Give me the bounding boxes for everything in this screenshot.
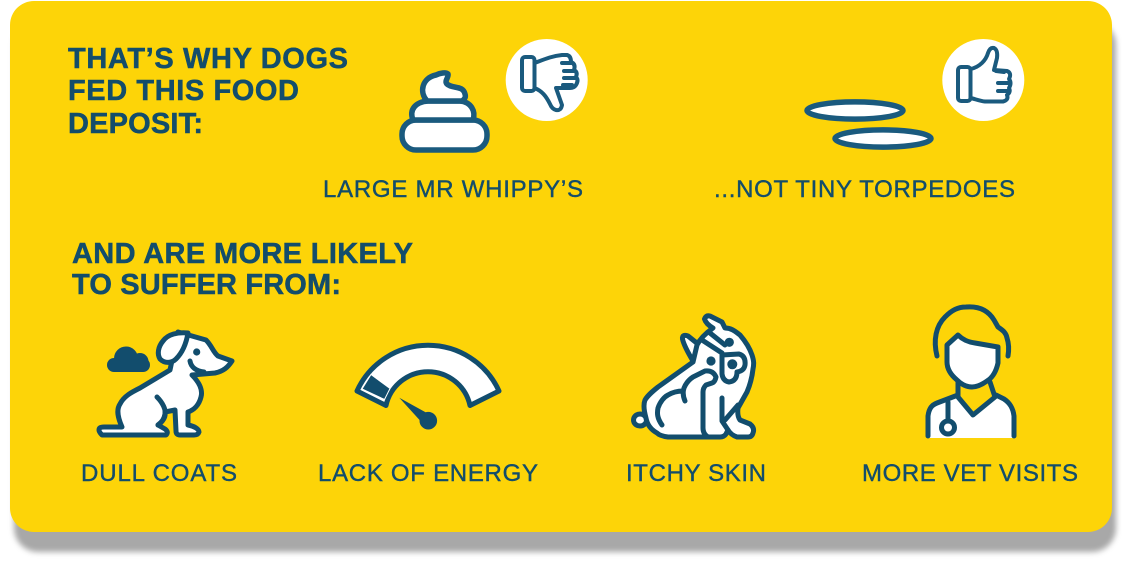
heading: and are more likely to suffer from: TO SUFFER FROM: bbox=[72, 269, 341, 301]
dog ear bbox=[158, 333, 188, 362]
shoulders bbox=[928, 395, 1014, 438]
heading: and are more likely to suffer from: AND ARE MORE LIKELY bbox=[72, 238, 413, 270]
label: not tiny torpedoes: ...NOT TINY TORPEDOES bbox=[714, 176, 1015, 203]
icon: low energy gauge bbox=[357, 345, 499, 430]
face bbox=[947, 335, 998, 387]
label: large mr whippy's: LARGE MR WHIPPY’S bbox=[323, 176, 583, 203]
icon: large soft-serve poop bbox=[402, 73, 487, 150]
nose and eyes bbox=[727, 359, 737, 369]
front legs bbox=[722, 398, 738, 430]
left ear bbox=[682, 335, 698, 361]
icon: itchy scratching dog bbox=[634, 316, 754, 437]
dog body bbox=[99, 332, 232, 435]
raised paw and haunch bbox=[657, 371, 716, 437]
icon: thumbs down badge bbox=[506, 39, 588, 121]
tail bbox=[634, 414, 646, 426]
heading: that's why dogs fed this food deposit bbox=[68, 43, 348, 140]
label: dull coats: DULL COATS bbox=[81, 460, 237, 487]
heading: that's why dogs fed this food deposit: FED THIS FOOD bbox=[68, 75, 299, 107]
neck and collar bbox=[958, 380, 995, 415]
heading: that's why dogs fed this food deposit: DEPOSIT: bbox=[68, 108, 203, 140]
dog details bbox=[157, 361, 204, 425]
heading: that's why dogs fed this food deposit: THAT’S WHY DOGS bbox=[68, 43, 348, 75]
icon: dog with dull coat and cloud bbox=[99, 332, 232, 435]
stethoscope bbox=[946, 402, 950, 421]
heading: and are more likely to suffer from bbox=[72, 238, 413, 301]
hair bbox=[935, 307, 1009, 356]
icon: tiny torpedoes bbox=[807, 102, 931, 147]
icon: thumbs up badge bbox=[942, 39, 1024, 121]
body and head bbox=[644, 316, 754, 437]
label: lack of energy: LACK OF ENERGY bbox=[318, 460, 538, 487]
icon: vet bbox=[928, 307, 1014, 438]
label: itchy skin: ITCHY SKIN bbox=[626, 460, 766, 487]
cloud bbox=[107, 346, 150, 372]
muzzle bbox=[722, 354, 745, 382]
label: more vet visits: MORE VET VISITS bbox=[862, 460, 1078, 487]
bandage marks bbox=[702, 333, 725, 353]
